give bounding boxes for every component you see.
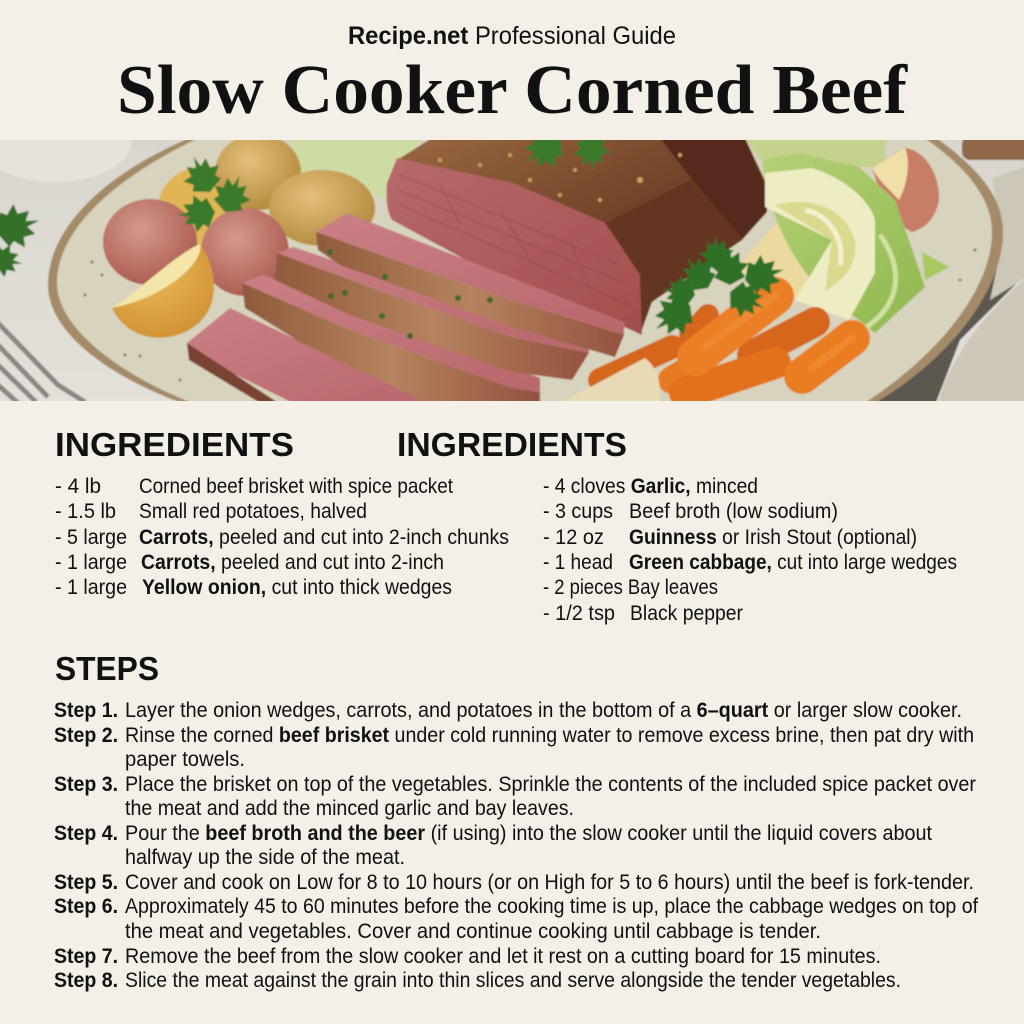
step 4: Pour the beef broth and the beer (if using) into the slow cooker until the liquid covers about bbox=[125, 821, 932, 845]
herb specks bbox=[327, 249, 493, 339]
loose parsley bbox=[0, 204, 40, 278]
step 2: Step 2. bbox=[54, 723, 118, 747]
brand line: Recipe.net Professional Guide bbox=[348, 22, 676, 50]
step 2: Rinse the corned beef brisket under cold running water to remove excess brine, then pat dry with bbox=[125, 723, 974, 747]
list: - 1 large bbox=[55, 550, 127, 574]
list: - 1.5 lb bbox=[55, 499, 116, 523]
step 3 bbox=[54, 772, 976, 820]
dark table right bbox=[876, 238, 1016, 401]
list: - 1 head bbox=[543, 550, 613, 574]
list bbox=[55, 474, 509, 599]
parsley on roast bbox=[525, 140, 610, 170]
potatoes left bbox=[103, 134, 375, 338]
list: Green cabbage, cut into large wedges bbox=[629, 550, 957, 574]
heading: INGREDIENTS bbox=[55, 426, 294, 463]
cabbage bbox=[762, 153, 949, 333]
cut face bbox=[387, 158, 642, 335]
parsley on carrots bbox=[654, 236, 784, 336]
list bbox=[543, 474, 957, 625]
wood board bbox=[961, 140, 1024, 161]
list: - 1/2 tsp bbox=[543, 601, 615, 625]
lower napkin bbox=[938, 275, 1024, 405]
list: Yellow onion, cut into thick wedges bbox=[142, 575, 452, 599]
step 7: Remove the beef from the slow cooker and let it rest on a cutting board for 15 minutes. bbox=[125, 944, 881, 968]
parsley on potatoes bbox=[178, 156, 251, 233]
bottom potato wedge bbox=[562, 358, 660, 404]
step 4: Step 4. bbox=[54, 821, 118, 845]
table linen bbox=[0, 135, 1024, 405]
step 1: Step 1. bbox=[54, 698, 118, 722]
slice three bbox=[242, 275, 540, 392]
bowl bbox=[0, 140, 131, 182]
step 2: paper towels. bbox=[125, 747, 245, 771]
step 1: Layer the onion wedges, carrots, and potatoes in the bottom of a 6–quart or larger slow cooker. bbox=[125, 698, 962, 722]
slice four bbox=[187, 308, 432, 404]
crust bbox=[397, 138, 767, 335]
list: - 3 cups bbox=[543, 499, 613, 523]
step 7: Step 7. bbox=[54, 944, 118, 968]
step 4 bbox=[54, 821, 932, 869]
step 6: Step 6. bbox=[54, 894, 118, 918]
plate rim bbox=[48, 135, 1003, 406]
step 3: the meat and add the minced garlic and bay leaves. bbox=[125, 796, 574, 820]
crust spices bbox=[438, 153, 682, 202]
slice one bbox=[316, 213, 624, 335]
step 8: Slice the meat against the grain into thin slices and serve alongside the tender vegetables. bbox=[125, 968, 901, 992]
ingredients column one bbox=[55, 426, 509, 599]
step 6: the meat and vegetables. Cover and continue cooking until cabbage is tender. bbox=[125, 919, 821, 943]
right red potato bbox=[872, 148, 939, 232]
step 5: Cover and cook on Low for 8 to 10 hours (or on High for 5 to 6 hours) until the beef is fork-tender. bbox=[125, 870, 974, 894]
hero photo illustration: corned beef plate bbox=[0, 140, 1024, 401]
list: - 12 oz bbox=[543, 525, 604, 549]
list: - 4 lb bbox=[55, 474, 101, 498]
roast bbox=[387, 138, 767, 335]
list: Beef broth (low sodium) bbox=[629, 499, 838, 523]
header bbox=[117, 22, 908, 129]
beef slices bbox=[187, 213, 624, 404]
plate speckles bbox=[84, 248, 976, 382]
step 3: Step 3. bbox=[54, 772, 118, 796]
list: - 4 cloves Garlic, minced bbox=[543, 474, 758, 498]
step 2 bbox=[54, 723, 974, 771]
list: - 1 large bbox=[55, 575, 127, 599]
title: Slow Cooker Corned Beef bbox=[117, 52, 908, 129]
step 3: Place the brisket on top of the vegetables. Sprinkle the contents of the included spice packet over bbox=[125, 772, 976, 796]
step 5: Step 5. bbox=[54, 870, 118, 894]
list: - 5 large bbox=[55, 525, 127, 549]
heading: INGREDIENTS bbox=[397, 426, 627, 463]
steps bbox=[54, 650, 978, 992]
list: Black pepper bbox=[630, 601, 743, 625]
step 6 bbox=[54, 894, 978, 943]
list: Carrots, peeled and cut into 2-inch bbox=[141, 550, 444, 574]
small potato right bbox=[741, 222, 808, 298]
plate well bbox=[57, 135, 992, 406]
fork bbox=[0, 323, 85, 403]
list: Guinness or Irish Stout (optional) bbox=[629, 525, 917, 549]
list: Corned beef brisket with spice packet bbox=[139, 474, 453, 498]
ingredients column two bbox=[397, 426, 957, 625]
step 4: halfway up the side of the meat. bbox=[125, 845, 405, 869]
list: - 2 pieces Bay leaves bbox=[543, 575, 718, 599]
heading: STEPS bbox=[55, 650, 159, 687]
slice two bbox=[277, 247, 589, 353]
list: Carrots, peeled and cut into 2-inch chunks bbox=[139, 525, 509, 549]
step 8: Step 8. bbox=[54, 968, 118, 992]
upper napkin bbox=[990, 165, 1024, 300]
list: Small red potatoes, halved bbox=[139, 499, 367, 523]
carrots bbox=[600, 296, 852, 393]
back cabbage bbox=[290, 138, 420, 200]
